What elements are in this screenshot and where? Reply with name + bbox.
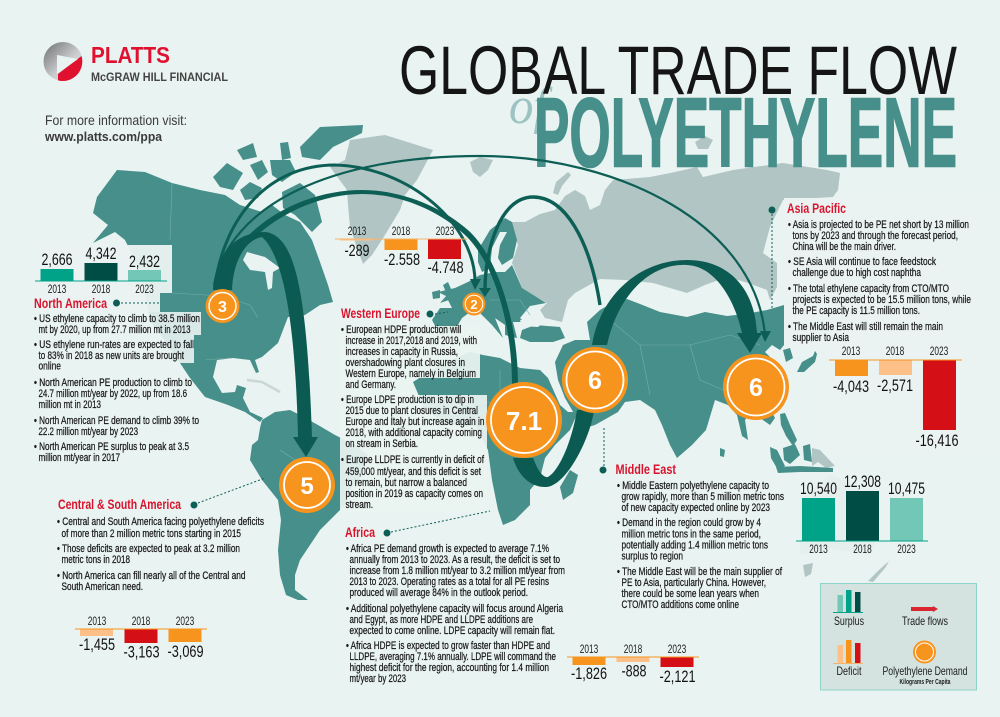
bar chart: North America surplus: 2023 xyxy=(135,282,154,296)
heading: Western Europe: Western Europe xyxy=(341,306,420,321)
text block: Asia Pacific bullets: China will be the main driver. xyxy=(792,241,896,253)
text block: North America bullets: to 83% in 2018 as new units are brought xyxy=(38,350,184,362)
arrow: Middle East to Africa loop xyxy=(513,410,594,487)
text block: Western Europe bullets: stream. xyxy=(346,499,373,511)
bar chart: Africa deficit: 2013 xyxy=(580,642,598,656)
text block: Middle East bullets: • Demand in the region could grow by 4 xyxy=(617,517,761,529)
text block: Africa bullets: LLDPE, averaging 7.1% annually. LDPE will command the xyxy=(350,651,556,663)
bar chart: North America surplus: 2,432 xyxy=(129,252,160,271)
text block: Middle East bullets: • Middle Eastern polyethylene capacity to xyxy=(617,480,769,492)
arrow: North America to Africa xyxy=(217,190,518,385)
Platts logo xyxy=(44,42,228,84)
bar chart: Africa deficit: -2,121 xyxy=(660,667,696,686)
bar chart: Western Europe deficit xyxy=(335,224,467,277)
text block: North America bullets: mt by 2020, up from 27.7 million mt in 2013 xyxy=(38,324,190,336)
panel: Africa xyxy=(345,511,699,686)
text block: Western Europe bullets xyxy=(341,324,485,511)
demand circle 3 xyxy=(206,289,240,323)
demand circle 6 Middle East: 6 xyxy=(588,367,602,395)
bar chart: Western Europe deficit: -4.748 xyxy=(428,258,464,277)
bar chart: Asia Pacific deficit: -4,043 xyxy=(833,377,869,396)
Platts logo: McGRAW HILL FINANCIAL xyxy=(91,70,228,84)
bar chart: Middle East surplus xyxy=(796,472,928,556)
panel: Western Europe xyxy=(335,224,485,511)
text block: Asia Pacific bullets: the PE capacity is 11.5 million tons. xyxy=(792,305,920,317)
Platts logo: PLATTS xyxy=(91,42,170,68)
text block: North America bullets: 24.7 million mt/year by 2022, up from 18.6 xyxy=(38,388,187,400)
legend: demand label: Polyethylene Demand xyxy=(882,664,968,678)
text block: Asia Pacific bullets: challenge due to high cost naphtha xyxy=(792,267,921,279)
text block: Western Europe bullets: increase in 2017,2018 and 2019, with xyxy=(346,335,477,347)
bar chart: Middle East surplus: 2023 xyxy=(897,542,916,556)
text block: Central and South America bullets: • Central and South America facing polyethylene deficits xyxy=(57,516,264,528)
text block: North America bullets: • US ethylene capacity to climb to 38.5 million xyxy=(34,313,200,325)
arrow: North America to South America xyxy=(213,232,318,457)
legend: demand circle icon xyxy=(913,640,936,664)
arrow: North America to Asia xyxy=(214,156,771,342)
bar chart: Africa deficit: -1,826 xyxy=(571,664,607,683)
text block: Central and South America bullets: South American need. xyxy=(62,581,143,593)
bar chart: Western Europe deficit: -2.558 xyxy=(384,250,420,269)
text block: Western Europe bullets: increases in capacity in Russia, xyxy=(346,346,458,358)
text block: Central and South America bullets: • Those deficits are expected to peak at 3.2 million xyxy=(57,543,240,555)
text block: Western Europe bullets: position in 2019 as capacity comes on xyxy=(346,488,483,500)
legend xyxy=(820,584,976,690)
text block: Middle East bullets: there could be some lean years when xyxy=(622,588,759,600)
bar chart: Central and South America deficit: 2018 xyxy=(132,614,150,628)
text block: North America bullets: million mt/year in 2017 xyxy=(38,452,120,464)
legend: demand unit: Kilograms Per Capita xyxy=(900,679,951,686)
bar chart: North America surplus xyxy=(35,244,167,296)
text block: Middle East bullets: of new capacity expected online by 2023 xyxy=(622,502,770,514)
text block: Middle East bullets: • The Middle East will be the main supplier of xyxy=(617,566,783,578)
text block: Western Europe bullets: to remain, but narrow a balanced xyxy=(346,477,467,489)
text block: North America bullets: • North American PE surplus to peak at 3.5 xyxy=(34,441,189,453)
more information text: www.platts.com/ppa xyxy=(44,129,163,144)
leader: Middle East xyxy=(600,428,606,474)
text block: Western Europe bullets: on stream in Serbia. xyxy=(346,438,418,450)
leader: Central and South America xyxy=(190,478,265,508)
more information text xyxy=(44,112,187,144)
text block: Africa bullets: annually from 2013 to 2023. As a result, the deficit is set to xyxy=(350,554,560,566)
bar chart: Western Europe deficit: -289 xyxy=(344,241,370,260)
text block: Central and South America bullets: • North America can fill nearly all of the Central and xyxy=(57,570,246,582)
text block: North America bullets: million mt in 2013 xyxy=(38,399,101,411)
text block: Asia Pacific bullets: • The total ethylene capacity from CTO/MTO xyxy=(788,283,949,295)
bar chart: Central and South America deficit: -3,069 xyxy=(168,642,204,661)
bar chart: Central and South America deficit: 2013 xyxy=(88,614,106,628)
text block: Western Europe bullets: 2015 due to plant closures in Central xyxy=(346,405,478,417)
demand circle 7.1: 7.1 xyxy=(506,406,542,436)
bar chart: North America surplus: 4,342 xyxy=(86,244,116,263)
heading: Middle East: Middle East xyxy=(616,462,676,477)
demand circle 6 Asia: 6 xyxy=(749,374,763,402)
heading: Asia Pacific: Asia Pacific xyxy=(787,201,846,216)
text block: Africa bullets: increase from 1.8 million mt/year to 3.2 million mt/year from xyxy=(350,565,565,577)
bar chart: Asia Pacific deficit: -16,416 xyxy=(916,431,958,450)
text block: North America bullets xyxy=(34,313,200,464)
heading: Africa: Africa xyxy=(345,525,375,540)
text block: Western Europe bullets: 2018, with additional capacity coming xyxy=(346,427,482,439)
panel: North America xyxy=(34,244,200,464)
bar chart: Africa deficit: 2023 xyxy=(668,642,686,656)
arrow: Middle East to Europe xyxy=(479,197,600,305)
bar chart: Middle East surplus: 12,308 xyxy=(844,472,881,491)
panel: Asia Pacific xyxy=(768,201,971,450)
text block: Africa bullets: produced will average 84% in the outlook period. xyxy=(350,587,528,599)
text block: Africa bullets: • Additional polyethylene capacity will focus around Algeria xyxy=(346,603,563,615)
leader: North America xyxy=(113,300,160,306)
arrow: North America to Western Europe xyxy=(215,165,481,290)
demand circle 5: 5 xyxy=(300,473,314,500)
text block: Central and South America bullets: metric tons in 2018 xyxy=(62,554,130,566)
text block: Africa bullets xyxy=(346,543,565,685)
text block: Central and South America bullets xyxy=(57,516,264,593)
trade flow arrows xyxy=(213,156,771,487)
demand circle 6 Middle East xyxy=(562,347,628,413)
bar chart: Western Europe deficit: 2018 xyxy=(392,224,410,238)
text block: North America bullets: 22.2 million mt/year by 2023 xyxy=(38,426,138,438)
title xyxy=(399,32,957,188)
bar chart: Central and South America deficit xyxy=(75,614,207,662)
text block: North America bullets: • North American PE demand to climb 39% to xyxy=(34,415,199,427)
demand circle 2 xyxy=(462,292,486,316)
demand circle 5 xyxy=(279,457,335,513)
bar chart: Western Europe deficit: 2023 xyxy=(436,224,454,238)
text block: Asia Pacific bullets: supplier to Asia xyxy=(792,332,849,344)
heading: North America: North America xyxy=(34,296,107,311)
title word: of: of xyxy=(509,78,553,135)
bar chart: Asia Pacific deficit: 2013 xyxy=(842,344,860,358)
text block: Africa bullets: expected to come online. LDPE capacity will remain flat. xyxy=(350,625,555,637)
bar chart: Asia Pacific deficit: 2023 xyxy=(930,344,948,358)
demand circle 2: 2 xyxy=(470,297,478,312)
text block: Western Europe bullets: • European HDPE production will xyxy=(341,324,462,336)
bar chart: Central and South America deficit: -1,455 xyxy=(79,635,115,654)
text block: Western Europe bullets: Western Europe, namely in Belgium xyxy=(346,368,476,380)
bar chart: Western Europe deficit: 2013 xyxy=(348,224,366,238)
more information text: For more information visit: xyxy=(45,112,187,128)
bar chart: Central and South America deficit: 2023 xyxy=(176,614,194,628)
text block: Africa bullets: mt/year by 2023 xyxy=(350,673,406,685)
bar chart: Africa deficit xyxy=(567,642,699,686)
text block: Western Europe bullets: Europe and Italy but increase again in xyxy=(346,416,484,428)
bar chart: Central and South America deficit: -3,163 xyxy=(124,642,160,662)
bar chart: North America surplus: 2018 xyxy=(92,282,110,296)
legend: trade flows arrow xyxy=(911,606,938,612)
text block: Middle East bullets: grow rapidly, more than 5 million metric tons xyxy=(622,491,784,503)
text block: North America bullets: online xyxy=(38,360,61,372)
text block: Middle East bullets xyxy=(617,480,784,611)
bar chart: Middle East surplus: 10,475 xyxy=(888,479,925,498)
text block: Middle East bullets: million metric tons in the same period, xyxy=(622,528,761,540)
text block: Asia Pacific bullets xyxy=(788,219,971,344)
text block: Middle East bullets: potentially adding 1.4 million metric tons xyxy=(622,540,768,552)
bar chart: North America surplus: 2013 xyxy=(48,282,66,296)
text block: Africa bullets: • Africa PE demand growth is expected to average 7.1% xyxy=(346,543,549,555)
text block: Western Europe bullets: • Europe LDPE production is to dip in xyxy=(341,394,474,406)
text block: North America bullets: • US ethylene run-rates are expected to fall xyxy=(34,339,194,351)
legend: surplus label: Surplus xyxy=(834,614,864,628)
bar chart: Africa deficit: -888 xyxy=(622,662,646,680)
bar chart: Asia Pacific deficit xyxy=(829,344,962,450)
text block: Western Europe bullets: and Germany. xyxy=(346,379,396,391)
panel: Central and South America xyxy=(57,478,265,662)
bar chart: Middle East surplus: 2013 xyxy=(809,542,828,556)
bar chart: Middle East surplus: 2018 xyxy=(853,542,872,556)
leader: Western Europe xyxy=(426,310,448,318)
panel: Middle East xyxy=(600,428,928,611)
bar chart: Middle East surplus: 10,540 xyxy=(800,479,837,498)
bar chart: Africa deficit: 2018 xyxy=(624,642,642,656)
text block: Africa bullets: 2013 to 2023. Operating rates as a total for all PE resins xyxy=(350,576,549,588)
world map xyxy=(93,125,890,600)
bar chart: Asia Pacific deficit: 2018 xyxy=(886,344,904,358)
arrow: Middle East to Asia xyxy=(592,260,762,353)
legend: trade flows label: Trade flows xyxy=(902,614,948,628)
text block: Central and South America bullets: of more than 2 million metric tons starting in 2015 xyxy=(62,528,241,540)
legend: deficit icon xyxy=(833,640,863,664)
leader: Asia Pacific xyxy=(768,206,776,310)
bar chart: North America surplus: 2,666 xyxy=(42,250,72,269)
legend: surplus icon xyxy=(833,590,863,613)
text block: Western Europe bullets: • Europe LLDPE is currently in deficit of xyxy=(341,454,485,466)
bar chart: Asia Pacific deficit: -2,571 xyxy=(877,376,913,395)
text block: Middle East bullets: PE to Asia, particularly China. However, xyxy=(622,577,766,589)
text backing panels xyxy=(33,198,1000,563)
demand circle 7.1 xyxy=(486,382,562,458)
text block: Middle East bullets: surplus to region xyxy=(622,550,683,562)
text block: Africa bullets: highest deficit for the region, accounting for 1.4 million xyxy=(350,662,549,674)
text block: Asia Pacific bullets: • SE Asia will continue to face feedstock xyxy=(788,256,936,268)
heading: Central and South America: Central & South America xyxy=(58,497,181,512)
text block: Middle East bullets: CTO/MTO additions come online xyxy=(622,599,739,611)
text block: North America bullets: • North American PE production to climb to xyxy=(34,377,192,389)
leader: Africa xyxy=(384,511,490,536)
legend: deficit label: Deficit xyxy=(836,664,862,678)
text block: Western Europe bullets: overshadowing plant closures in xyxy=(346,357,465,369)
demand circle 3: 3 xyxy=(218,299,227,316)
text block: Africa bullets: • Africa HDPE is expected to grow faster than HDPE and xyxy=(346,640,550,652)
demand circle 6 Asia xyxy=(723,354,789,420)
text block: Africa bullets: and Egypt, as more HDPE and LLDPE additions are xyxy=(350,614,533,626)
text block: Asia Pacific bullets: • The Middle East will still remain the main xyxy=(788,321,943,333)
text block: Western Europe bullets: 459,000 mt/year, and this deficit is set xyxy=(346,466,481,478)
